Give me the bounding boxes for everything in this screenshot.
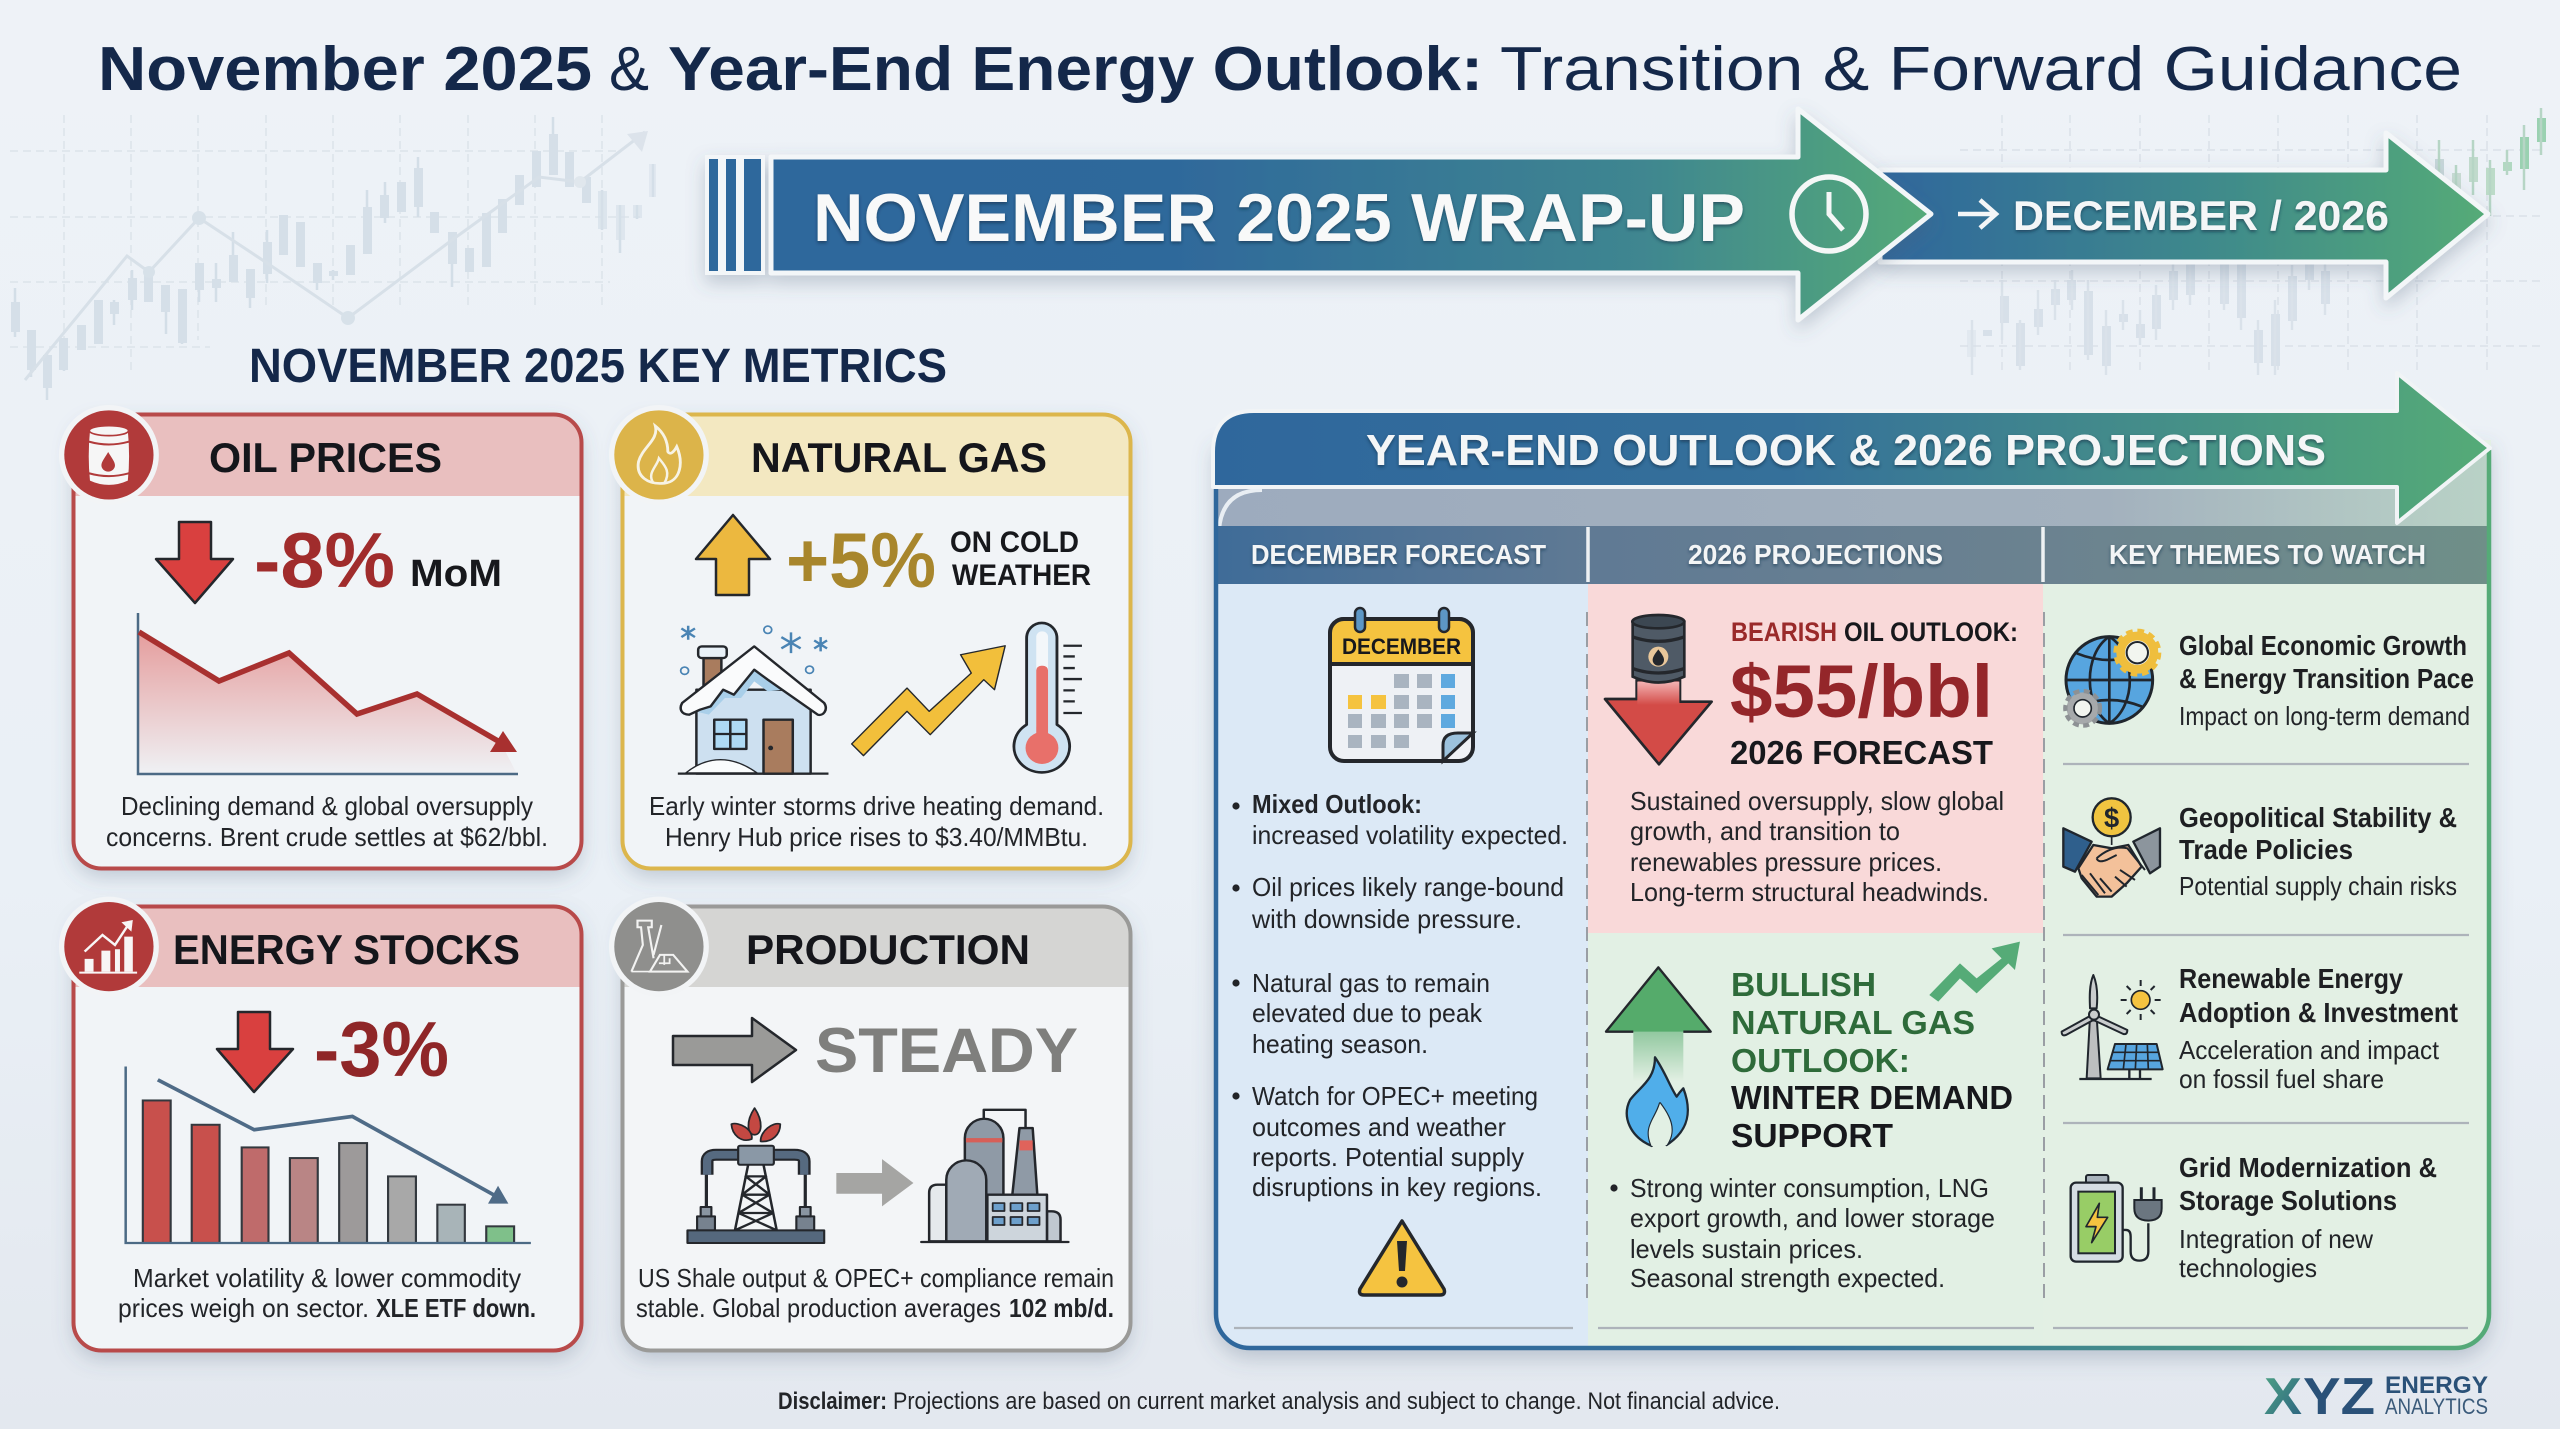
subheading: WINTER DEMAND (1731, 1079, 2013, 1116)
icon: wind turbine and solar panel (2062, 975, 2163, 1079)
icon: rising chart (59, 897, 159, 997)
banner stripes (707, 157, 763, 273)
theme: renewable energy: on fossil fuel share (2179, 1064, 2384, 1094)
value: STEADY (815, 1016, 1078, 1086)
background chart: right candlesticks (1960, 108, 2546, 375)
illustration: snowy house, rising arrow, thermometer (678, 623, 1082, 774)
area chart (138, 613, 518, 774)
banner arrow: year-end outlook (1213, 373, 2490, 523)
heading: NATURAL GAS (751, 434, 1047, 481)
description (1610, 1184, 1618, 1192)
icon: up arrow with blue flame (1606, 942, 2020, 1146)
description: US Shale output & OPEC+ compliance remain (638, 1263, 1114, 1293)
icon: plant (609, 897, 709, 997)
illustration: derrick to refinery (687, 1108, 1068, 1243)
description: Declining demand & global oversupply (121, 791, 533, 821)
icon: battery and plug (2071, 1175, 2162, 1262)
panel: natural gas: ON COLD (950, 526, 1079, 559)
value: +5% (786, 516, 936, 604)
title: November 2025 (98, 35, 592, 104)
panel: year-end outlook (1213, 373, 2491, 1354)
title: Year-End Energy Outlook: (668, 35, 1483, 104)
theme: geopolitical stability (2063, 798, 2457, 901)
logo: XYZ Energy Analytics: ENERGY (2385, 1372, 2488, 1399)
heading: OIL PRICES (209, 434, 442, 481)
december forecast bullets: disruptions in key regions. (1252, 1172, 1542, 1202)
heading: key metrics: NOVEMBER 2025 KEY METRICS (249, 340, 947, 393)
arrow banner: November wrap-up (707, 109, 1931, 320)
section: bullish natural gas outlook: Seasonal strength expected. (1630, 1263, 1945, 1293)
december forecast bullets: with downside pressure. (1251, 904, 1522, 934)
december forecast bullets: elevated due to peak (1252, 998, 1483, 1028)
subheading: OUTLOOK: (1731, 1042, 1910, 1079)
section: bullish natural gas outlook: Strong winter consumption, LNG (1630, 1173, 1989, 1203)
december forecast bullets: heating season. (1252, 1029, 1428, 1059)
description: concerns. Brent crude settles at $62/bbl. (106, 822, 548, 852)
bar chart (126, 1066, 531, 1243)
december forecast bullets: Natural gas to remain (1252, 968, 1490, 998)
section: bullish natural gas outlook: export growth, and lower storage (1630, 1203, 1995, 1233)
text: Global Economic Growth (2179, 630, 2467, 661)
theme: grid modernization: Integration of new (2179, 1224, 2373, 1254)
section: bearish oil outlook: 2026 FORECAST (1730, 734, 1993, 771)
description: prices weigh on sector. (118, 1293, 369, 1323)
theme: renewable energy (2062, 963, 2458, 1094)
banner text: December / 2026: DECEMBER / 2026 (2013, 192, 2389, 239)
background chart: left candlesticks (10, 115, 656, 400)
icon: globe with gears (2065, 631, 2159, 726)
december forecast bullets (1232, 789, 1575, 1202)
description: 102 mb/d. (1009, 1293, 1114, 1323)
description: Henry Hub price rises to $3.40/MMBtu. (665, 822, 1088, 852)
theme: grid modernization: technologies (2179, 1253, 2317, 1283)
arrow glyph (1958, 200, 1996, 228)
value: -3% (314, 1005, 449, 1093)
text: Storage Solutions (2179, 1185, 2397, 1216)
column headings: DECEMBER FORECAST (1251, 539, 1546, 570)
down arrow (156, 522, 233, 603)
icon: handshake with coin (2063, 798, 2160, 897)
theme: global growth: Impact on long-term demand (2179, 701, 2470, 731)
description: Long-term structural headwinds. (1630, 877, 1989, 907)
icon: handshake with coin: $ (2104, 803, 2119, 834)
section: bullish natural gas outlook (1606, 942, 2022, 1293)
text: Trade Policies (2179, 834, 2353, 865)
theme: geopolitical stability: Potential supply chain risks (2179, 871, 2457, 901)
panel: oil prices (59, 405, 581, 868)
icon: oil barrel (59, 405, 159, 505)
theme: renewable energy: Acceleration and impact (2179, 1035, 2440, 1065)
icon: clock (1792, 177, 1866, 251)
description: renewables pressure prices. (1630, 847, 1942, 877)
title (98, 35, 2462, 104)
column headings: 2026 PROJECTIONS (1688, 539, 1943, 570)
banner text: wrap-up: NOVEMBER 2025 WRAP-UP (813, 180, 1745, 256)
december forecast bullets: Watch for OPEC+ meeting (1252, 1081, 1538, 1111)
icon: warning triangle (1360, 1221, 1444, 1295)
text: Geopolitical Stability & (2179, 802, 2457, 833)
arrow banner: December / 2026 (1880, 133, 2488, 298)
panel: natural gas (609, 405, 1130, 868)
section: bullish natural gas outlook: levels sustain prices. (1630, 1234, 1863, 1264)
december forecast bullets: Oil prices likely range-bound (1252, 872, 1564, 902)
description: Early winter storms drive heating demand. (649, 791, 1104, 821)
column headings: KEY THEMES TO WATCH (2109, 539, 2426, 570)
text: Renewable Energy (2179, 963, 2403, 994)
description: Market volatility & lower commodity (133, 1263, 521, 1293)
heading: PRODUCTION (746, 926, 1030, 973)
section: bearish oil outlook (1605, 615, 2018, 907)
panel: energy stocks (59, 897, 581, 1350)
logo: XYZ Energy Analytics (2264, 1368, 2488, 1426)
down arrow (217, 1012, 293, 1092)
panel: natural gas: WEATHER (952, 559, 1091, 592)
icon: barrel with down arrow (1605, 615, 1712, 764)
subheading: BULLISH (1731, 966, 1876, 1003)
text: & Energy Transition Pace (2179, 663, 2474, 694)
description: stable. Global production averages (636, 1293, 1001, 1323)
logo: XYZ Energy Analytics: ANALYTICS (2385, 1394, 2488, 1419)
right arrow (673, 1018, 796, 1082)
value: -8% (254, 516, 395, 604)
december forecast bullets: Mixed Outlook: (1252, 789, 1422, 819)
value: $55/bbl (1730, 650, 1993, 733)
subheading: SUPPORT (1731, 1117, 1893, 1154)
icon: december calendar: DECEMBER (1342, 634, 1461, 659)
column headings (1251, 539, 2426, 570)
theme: global growth (2065, 630, 2474, 731)
theme: grid modernization (2071, 1152, 2437, 1283)
text: Grid Modernization & (2179, 1152, 2437, 1183)
panel fills and column header band (1214, 450, 2491, 1354)
icon: flame (609, 405, 709, 505)
subheading: NATURAL GAS (1731, 1004, 1975, 1041)
disclaimer: Projections are based on current market analysis and subject to change. Not financial advice. (893, 1388, 1780, 1415)
banner heading: YEAR-END OUTLOOK & 2026 PROJECTIONS (1366, 426, 2326, 475)
panel: production (609, 897, 1130, 1350)
description: XLE ETF down. (376, 1293, 536, 1323)
title: & (609, 35, 649, 104)
description: growth, and transition to (1630, 816, 1900, 846)
description: Sustained oversupply, slow global (1630, 786, 2004, 816)
heading: ENERGY STOCKS (173, 926, 520, 973)
disclaimer: Disclaimer: (778, 1388, 887, 1415)
december forecast bullets: outcomes and weather (1252, 1112, 1506, 1142)
up arrow (696, 515, 770, 595)
text: Adoption & Investment (2179, 997, 2458, 1028)
december forecast bullets: reports. Potential supply (1252, 1142, 1524, 1172)
logo: XYZ Energy Analytics: YZ (2303, 1368, 2375, 1426)
section rules (1234, 764, 2469, 1328)
title: Transition & Forward Guidance (1500, 35, 2462, 104)
icon: december calendar (1330, 608, 1473, 761)
column dividers (1587, 612, 2044, 1305)
logo: XYZ Energy Analytics: X (2264, 1368, 2302, 1426)
subheading: BEARISH (1731, 617, 1837, 647)
december forecast bullets: increased volatility expected. (1252, 820, 1568, 850)
panel: oil prices: MoM (410, 553, 502, 595)
subheading: OIL OUTLOOK: (1844, 617, 2018, 647)
